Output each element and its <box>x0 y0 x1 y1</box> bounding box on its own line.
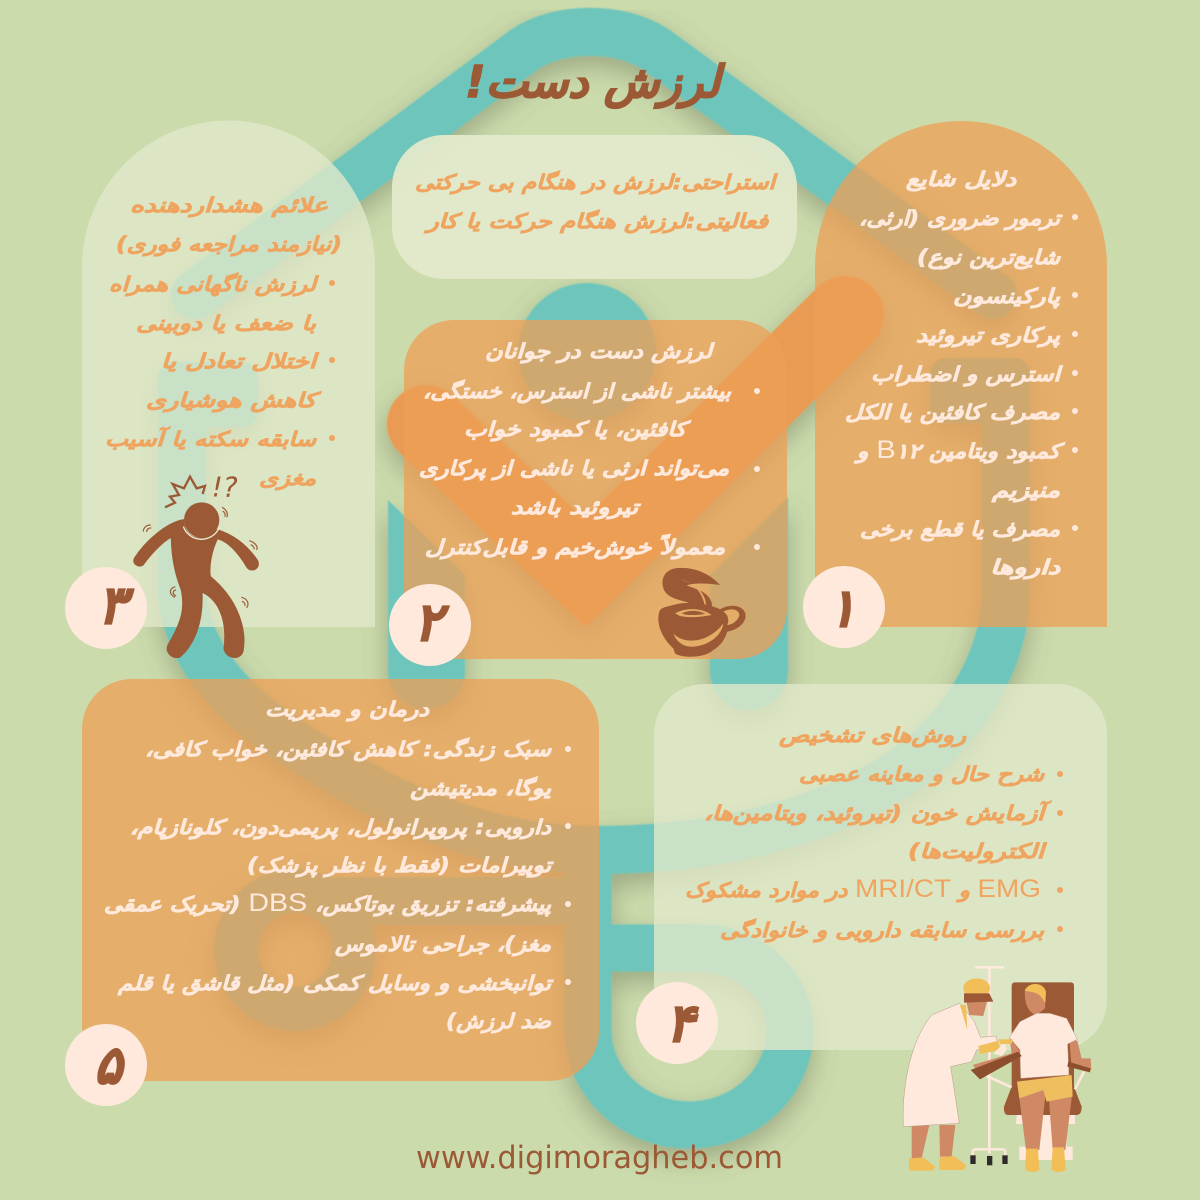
treatment text: ضد لرزش) <box>446 1009 552 1034</box>
number badge 3: ۳ <box>98 576 134 636</box>
chair <box>987 982 1084 1160</box>
causes text: منیزیم <box>991 478 1060 503</box>
definition text: فعالیتی:لرزش هنگام حرکت یا کار <box>423 209 770 234</box>
number badge 3 <box>65 567 147 649</box>
warning signs text <box>105 193 342 491</box>
IV pole <box>970 967 1008 1165</box>
treatment text: مغز)، جراحی تالاموس <box>334 932 551 957</box>
definition text <box>415 170 778 234</box>
young people text: لرزش دست در جوانان <box>485 339 715 364</box>
treatment text: توانبخشی و وسایل کمکی (مثل قاشق یا قلم <box>117 971 554 996</box>
causes text: داروها <box>990 555 1062 580</box>
treatment text: پیشرفته: تزریق بوتاکس، DBS (تحریک عمقی <box>104 889 551 917</box>
causes text: کمبود ویتامین B۱۲ و <box>854 436 1065 464</box>
diagnosis text <box>685 723 1063 943</box>
panel: rest vs action tremor <box>392 135 797 279</box>
causes text: دلایل شایع <box>906 167 1017 192</box>
number badge 5: ۵ <box>94 1036 125 1096</box>
young people text: معمولاً خوش‌خیم و قابل‌کنترل <box>425 534 725 560</box>
diagnosis text: بررسی سابقه دارویی و خانوادگی <box>720 918 1045 943</box>
diagnosis text: آزمایش خون (تیروئید، ویتامین‌ها، <box>704 800 1052 826</box>
treatment text: توپیرامات (فقط با نظر پزشک) <box>247 853 554 878</box>
warning signs text: با ضعف یا دوبینی <box>136 311 317 336</box>
warning signs text: علائم هشداردهنده <box>130 193 328 218</box>
causes text: استرس و اضطراب <box>871 362 1063 387</box>
warning signs text: سابقه سکته یا آسیب <box>105 426 317 451</box>
treatment text: سبک زندگی: کاهش کافئین، خواب کافی، <box>145 737 552 762</box>
young people text: کافئین، یا کمبود خواب <box>464 417 691 442</box>
background logo: stethoscope and check mark <box>158 32 1030 1125</box>
title: لرزش دست! <box>465 57 726 109</box>
number badge 5 <box>65 1024 147 1106</box>
panel 4: diagnosis methods <box>654 684 1107 1050</box>
treatment text: درمان و مدیریت <box>265 697 430 722</box>
diagnosis text: EMG و MRI/CT در موارد مشکوک <box>685 875 1041 903</box>
panel 2: tremor in young people <box>404 320 787 659</box>
number badge 2 <box>389 584 471 666</box>
warning signs text: اختلال تعادل یا <box>161 349 319 373</box>
treatment text: یوگا، مدیتیشن <box>410 776 552 801</box>
causes text: پرکاری تیروئید <box>916 323 1061 348</box>
icon: coffee cup <box>658 568 746 657</box>
young people text: می‌تواند ارثی یا ناشی از پرکاری <box>419 456 729 481</box>
young people text: بیشتر ناشی از استرس، خستگی، <box>423 379 731 404</box>
website address: www.digimoragheb.com <box>416 1140 783 1176</box>
panel 1: common causes <box>815 121 1107 627</box>
icon: shaking person: !? <box>212 471 238 504</box>
treatment text: دارویی: پروپرانولول، پریمی‌دون، کلونازپام، <box>130 815 552 840</box>
nurse <box>903 978 1013 1171</box>
warning signs text: لرزش ناگهانی همراه <box>109 272 319 297</box>
illustration: nurse and patient on infusion chair <box>903 967 1091 1172</box>
causes text <box>845 167 1078 580</box>
warning signs text: مغزی <box>259 466 316 491</box>
panel 3: warning signs <box>82 120 375 627</box>
number badge 4 <box>636 982 718 1064</box>
causes text: مصرف یا قطع برخی <box>860 517 1060 542</box>
diagnosis text: شرح حال و معاینه عصبی <box>799 762 1045 787</box>
patient <box>971 984 1091 1172</box>
young people text: تیروئید باشد <box>511 495 641 520</box>
treatment text <box>104 697 571 1034</box>
number badge 1 <box>803 566 885 648</box>
panel 5: treatment and management <box>82 679 599 1081</box>
warning signs text: کاهش هوشیاری <box>146 388 322 413</box>
causes text: ترمور ضروری (ارثی، <box>859 206 1063 231</box>
causes text: مصرف کافئین یا الکل <box>845 400 1060 425</box>
warning signs text: (نیازمند مراجعه فوری) <box>116 232 342 257</box>
definition text: استراحتی:لرزش در هنگام بی حرکتی <box>415 170 778 195</box>
number badge 2: ۲ <box>414 593 449 653</box>
icon: shaking person <box>134 471 258 657</box>
causes text: پارکینسون <box>953 284 1061 309</box>
number badge 4: ۴ <box>666 994 699 1054</box>
young people text <box>419 339 760 560</box>
number badge 1: ۱ <box>828 579 856 639</box>
causes text: شایع‌ترین نوع) <box>917 245 1061 270</box>
diagnosis text: الکترولیت‌ها) <box>908 839 1047 864</box>
diagnosis text: روش‌های تشخیص <box>778 723 966 748</box>
